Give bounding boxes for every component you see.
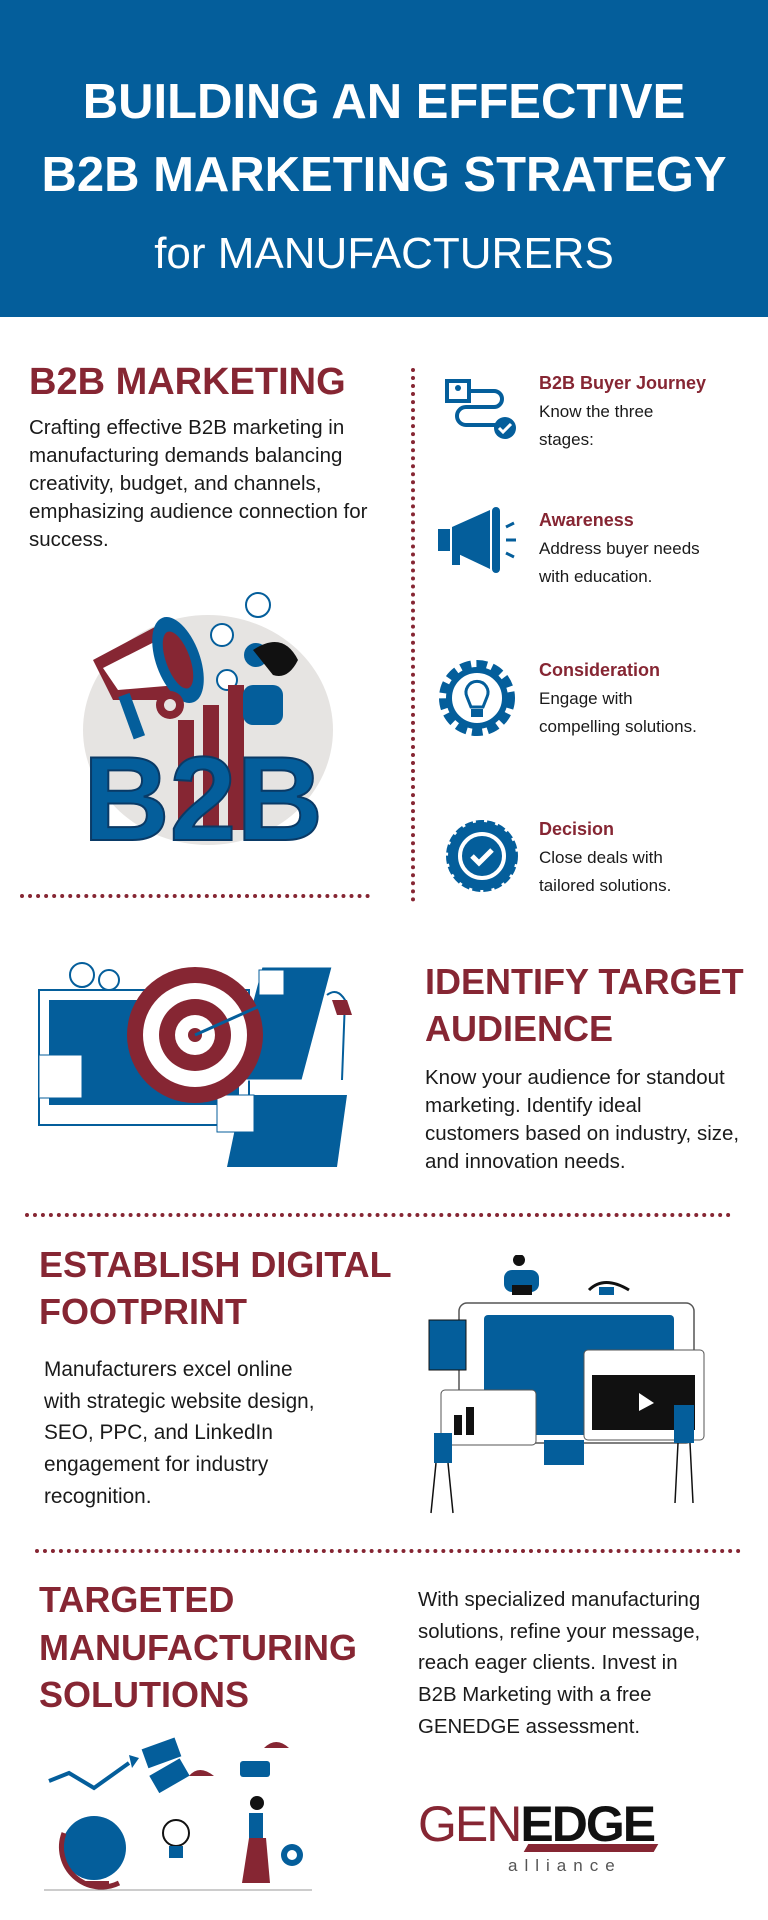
text block [425,1066,739,1173]
text block: SEO, PPC, and LinkedIn [44,1421,273,1444]
header banner [0,0,768,317]
icon: gear bulb [439,660,515,736]
stage: journey text [539,373,706,449]
heading [39,1579,357,1715]
text block: creativity, budget, and channels, [29,472,322,495]
illustration: B2B megaphone [83,592,333,850]
text block: Manufacturers excel online [44,1358,293,1381]
stage: decision: Decision [539,819,614,839]
title: B2B MARKETING STRATEGY [41,148,727,202]
text block: customers based on industry, size, [425,1122,739,1145]
stage: awareness: Address buyer needs [539,539,700,558]
heading [425,961,744,1049]
text block: engagement for industry [44,1453,268,1476]
text block: manufacturing demands balancing [29,444,342,467]
stage: consideration: compelling solutions. [539,717,697,736]
heading: AUDIENCE [425,1008,613,1049]
text block: emphasizing audience connection for [29,500,367,523]
heading: SOLUTIONS [39,1674,249,1715]
divider [35,1549,741,1553]
panel: identify target audience [425,961,744,1173]
heading: TARGETED [39,1579,234,1620]
illustration: solutions [44,1738,312,1890]
logo: GENEDGE alliance [418,1796,658,1875]
text block: Know your audience for standout [425,1066,725,1089]
stage: decision: tailored solutions. [539,876,671,895]
stage: journey text: B2B Buyer Journey [539,373,706,393]
stage: decision [539,819,671,895]
title: BUILDING AN EFFECTIVE [83,75,685,129]
text block: marketing. Identify ideal [425,1094,642,1117]
panel: establish digital footprint [39,1244,392,1508]
stage: awareness: with education. [539,567,652,586]
subtitle: for MANUFACTURERS [154,229,614,278]
logo: GENEDGE alliance: alliance [508,1856,622,1875]
text block: cta: reach eager clients. Invest in [418,1652,678,1674]
text block: Crafting effective B2B marketing in [29,416,344,439]
logo: GENEDGE alliance: GENEDGE [418,1796,654,1852]
divider: vertical dotted [411,368,415,902]
text block: cta [418,1589,700,1738]
icon: journey path [445,379,516,439]
icon: megaphone [438,507,516,573]
text block: cta: B2B Marketing with a free [418,1684,651,1706]
stage: consideration: Consideration [539,660,660,680]
heading: IDENTIFY TARGET [425,961,744,1002]
panel: targeted manufacturing solutions [39,1579,357,1715]
icon: check badge [446,820,518,892]
stage: consideration: Engage with [539,689,633,708]
stage: consideration [539,660,697,736]
panel: buyer journey [438,373,706,895]
text block: cta: GENEDGE assessment. [418,1716,640,1738]
heading [39,1244,392,1332]
heading: B2B MARKETING [29,361,346,403]
text block: success. [29,528,109,551]
stage: decision: Close deals with [539,848,663,867]
stage: awareness: Awareness [539,510,634,530]
divider: left horizontal dotted [20,894,370,898]
heading: ESTABLISH DIGITAL [39,1244,392,1285]
heading: FOOTPRINT [39,1291,247,1332]
illustration: target [38,962,352,1167]
text block [29,416,368,551]
text block: cta: solutions, refine your message, [418,1621,700,1643]
stage: journey text: Know the three [539,402,653,421]
heading: MANUFACTURING [39,1626,357,1668]
text block: cta: With specialized manufacturing [418,1589,700,1611]
divider [25,1213,731,1217]
text block: recognition. [44,1485,152,1508]
text block [44,1358,314,1508]
stage: awareness [539,510,700,586]
text block: and innovation needs. [425,1150,626,1173]
title [41,75,727,202]
panel: B2B marketing [29,361,368,551]
stage: journey text: stages: [539,430,594,449]
illustration: digital [428,1255,704,1514]
text block: with strategic website design, [44,1390,314,1413]
